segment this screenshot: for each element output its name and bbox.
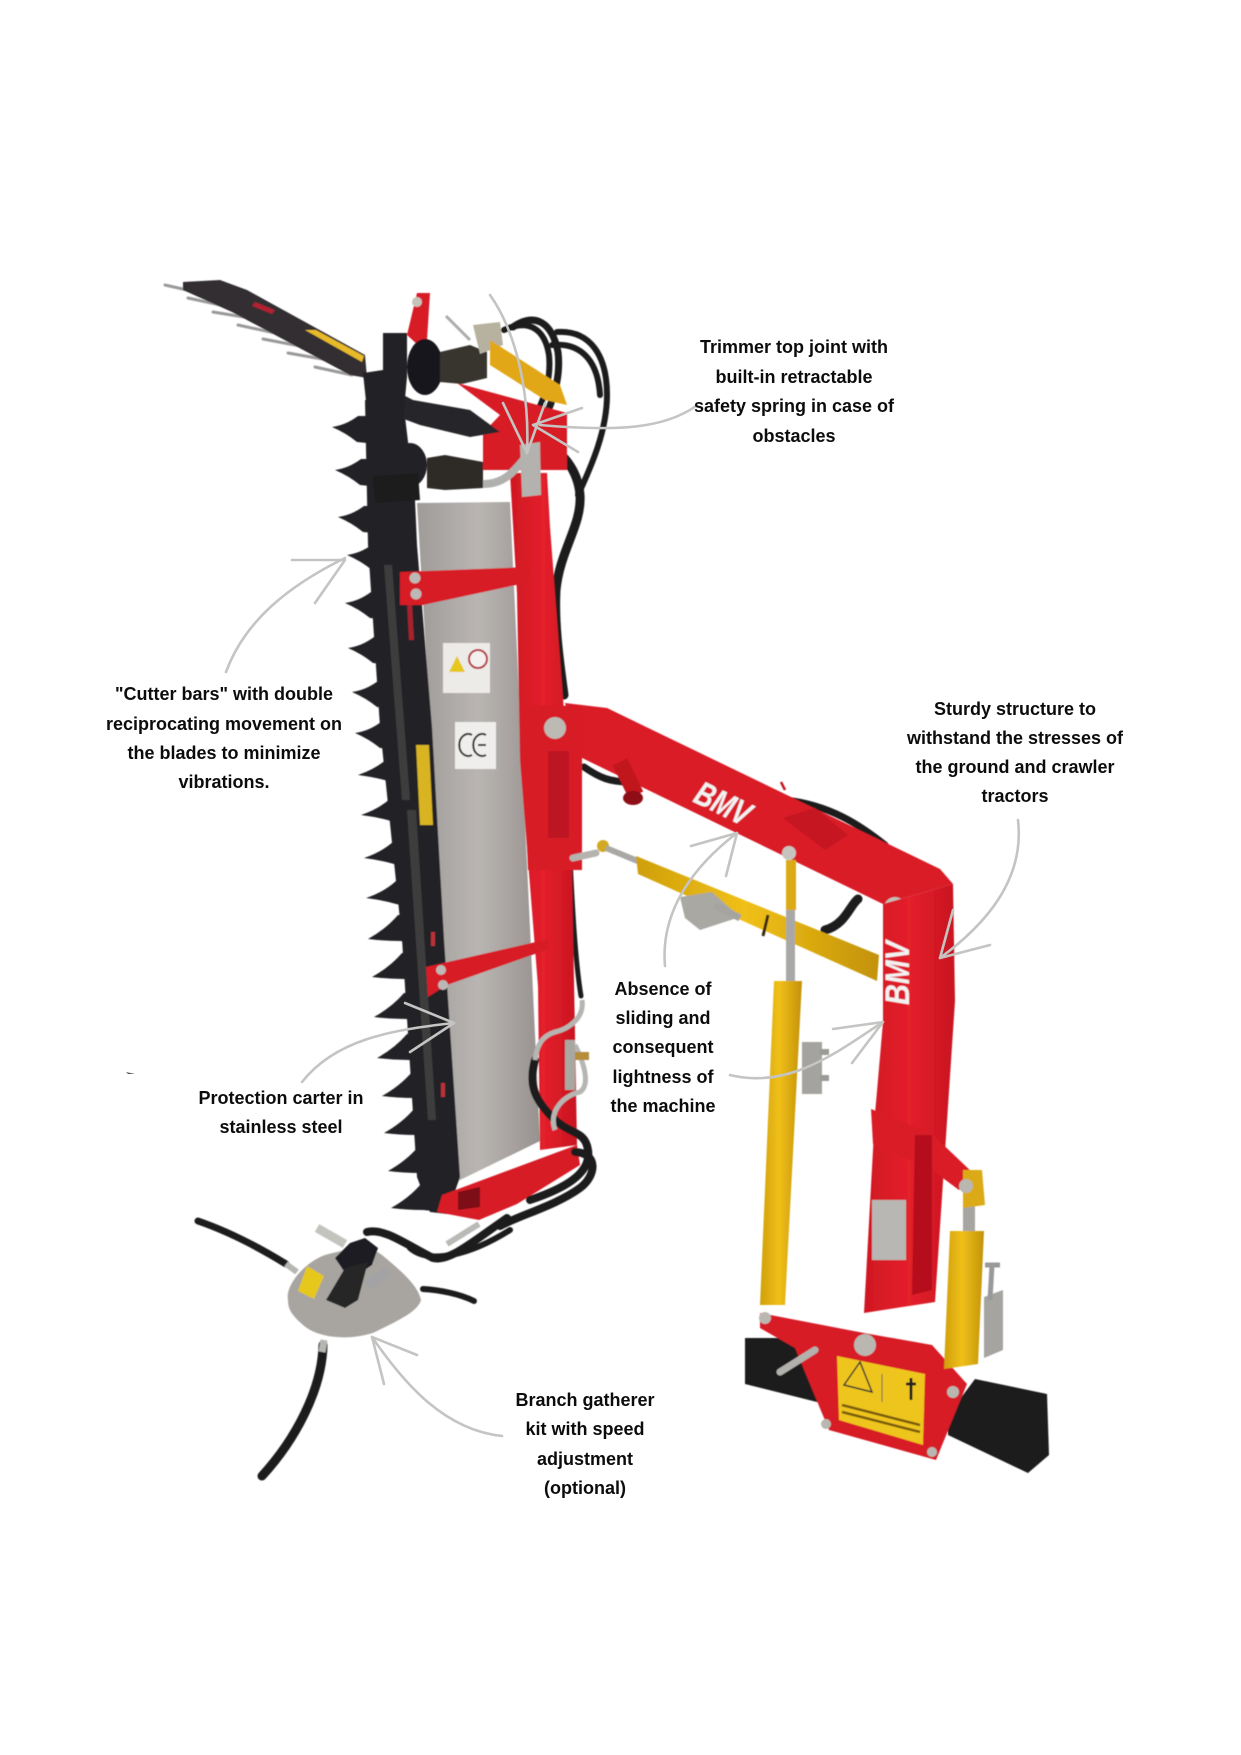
label: cutter bars: reciprocating movement on (106, 714, 342, 734)
label: cutter bars: "Cutter bars" with double (115, 684, 333, 704)
silver fittings top (473, 322, 503, 354)
lower gearbox (393, 443, 427, 487)
arrow: trimmer top joint (533, 406, 696, 452)
horizontal cutter bar (165, 280, 367, 378)
right red column (864, 884, 975, 1313)
logo: BMV on column: BMV (879, 938, 917, 1005)
rear hydraulic hoses (504, 320, 885, 996)
label: trimmer top joint: Trimmer top joint with (700, 337, 888, 357)
branch gatherer kit (198, 1218, 510, 1476)
vertical cutter bar with teeth (332, 400, 460, 1214)
panel stickers (443, 643, 496, 769)
yellow top cylinder (490, 340, 567, 405)
main red arm (521, 703, 953, 919)
stray mark (126, 1072, 135, 1074)
label: cutter bars: the blades to minimize (127, 743, 321, 763)
upper cutter head (363, 333, 407, 420)
arrow: cutter bars (226, 558, 345, 672)
label: trimmer top joint: obstacles (752, 426, 836, 446)
small yellow cylinder (944, 1170, 1003, 1369)
label: cutter bars: vibrations. (178, 772, 270, 792)
label: branch gatherer: (optional) (544, 1478, 626, 1498)
machine photo: hedge trimmer (165, 280, 1049, 1476)
label: trimmer top joint: built-in retractable (715, 367, 873, 387)
label: protection carter: stainless steel (219, 1117, 343, 1137)
label: branch gatherer: Branch gatherer (515, 1390, 655, 1410)
base plate with warning sign (759, 1312, 967, 1460)
label: protection carter: Protection carter in (198, 1088, 364, 1108)
label: absence of sliding: Absence of (614, 979, 713, 999)
label: branch gatherer: adjustment (537, 1449, 633, 1469)
label: absence of sliding: sliding and (615, 1008, 711, 1028)
upper blades (370, 378, 500, 437)
cross bars (400, 567, 530, 605)
label: absence of sliding: the machine (610, 1096, 716, 1116)
gearboxes and fittings (363, 297, 567, 990)
label: absence of sliding: lightness of (612, 1067, 715, 1087)
arrow: sturdy structure (940, 820, 1019, 958)
arrow: absence of sliding, to joint (730, 1022, 883, 1078)
label: trimmer top joint: safety spring in case of (694, 396, 895, 416)
yellow horizontal cylinder (573, 840, 879, 981)
label: sturdy structure: withstand the stresses of (906, 728, 1124, 748)
arrow: protection carter (302, 1003, 454, 1082)
logo: BMV on arm: BMV (688, 774, 760, 835)
arrow: absence of sliding, to arm (665, 833, 737, 966)
black base beam (745, 1338, 1049, 1473)
arrow: branch gatherer (372, 1337, 502, 1436)
red frame column (400, 293, 580, 1220)
label: sturdy structure: the ground and crawler (915, 757, 1115, 777)
label: absence of sliding: consequent (612, 1037, 714, 1057)
bottom tube (437, 1145, 580, 1220)
label: sturdy structure: tractors (981, 786, 1049, 806)
label: sturdy structure: Sturdy structure to (934, 699, 1096, 719)
lower fittings on frame (500, 1000, 593, 1226)
stainless steel protection panel (417, 502, 540, 1181)
yellow vertical cylinder (760, 846, 829, 1305)
label: branch gatherer: kit with speed (525, 1419, 645, 1439)
arrow: trimmer top joint, second (490, 295, 545, 453)
bolts on cross bars (410, 572, 420, 584)
